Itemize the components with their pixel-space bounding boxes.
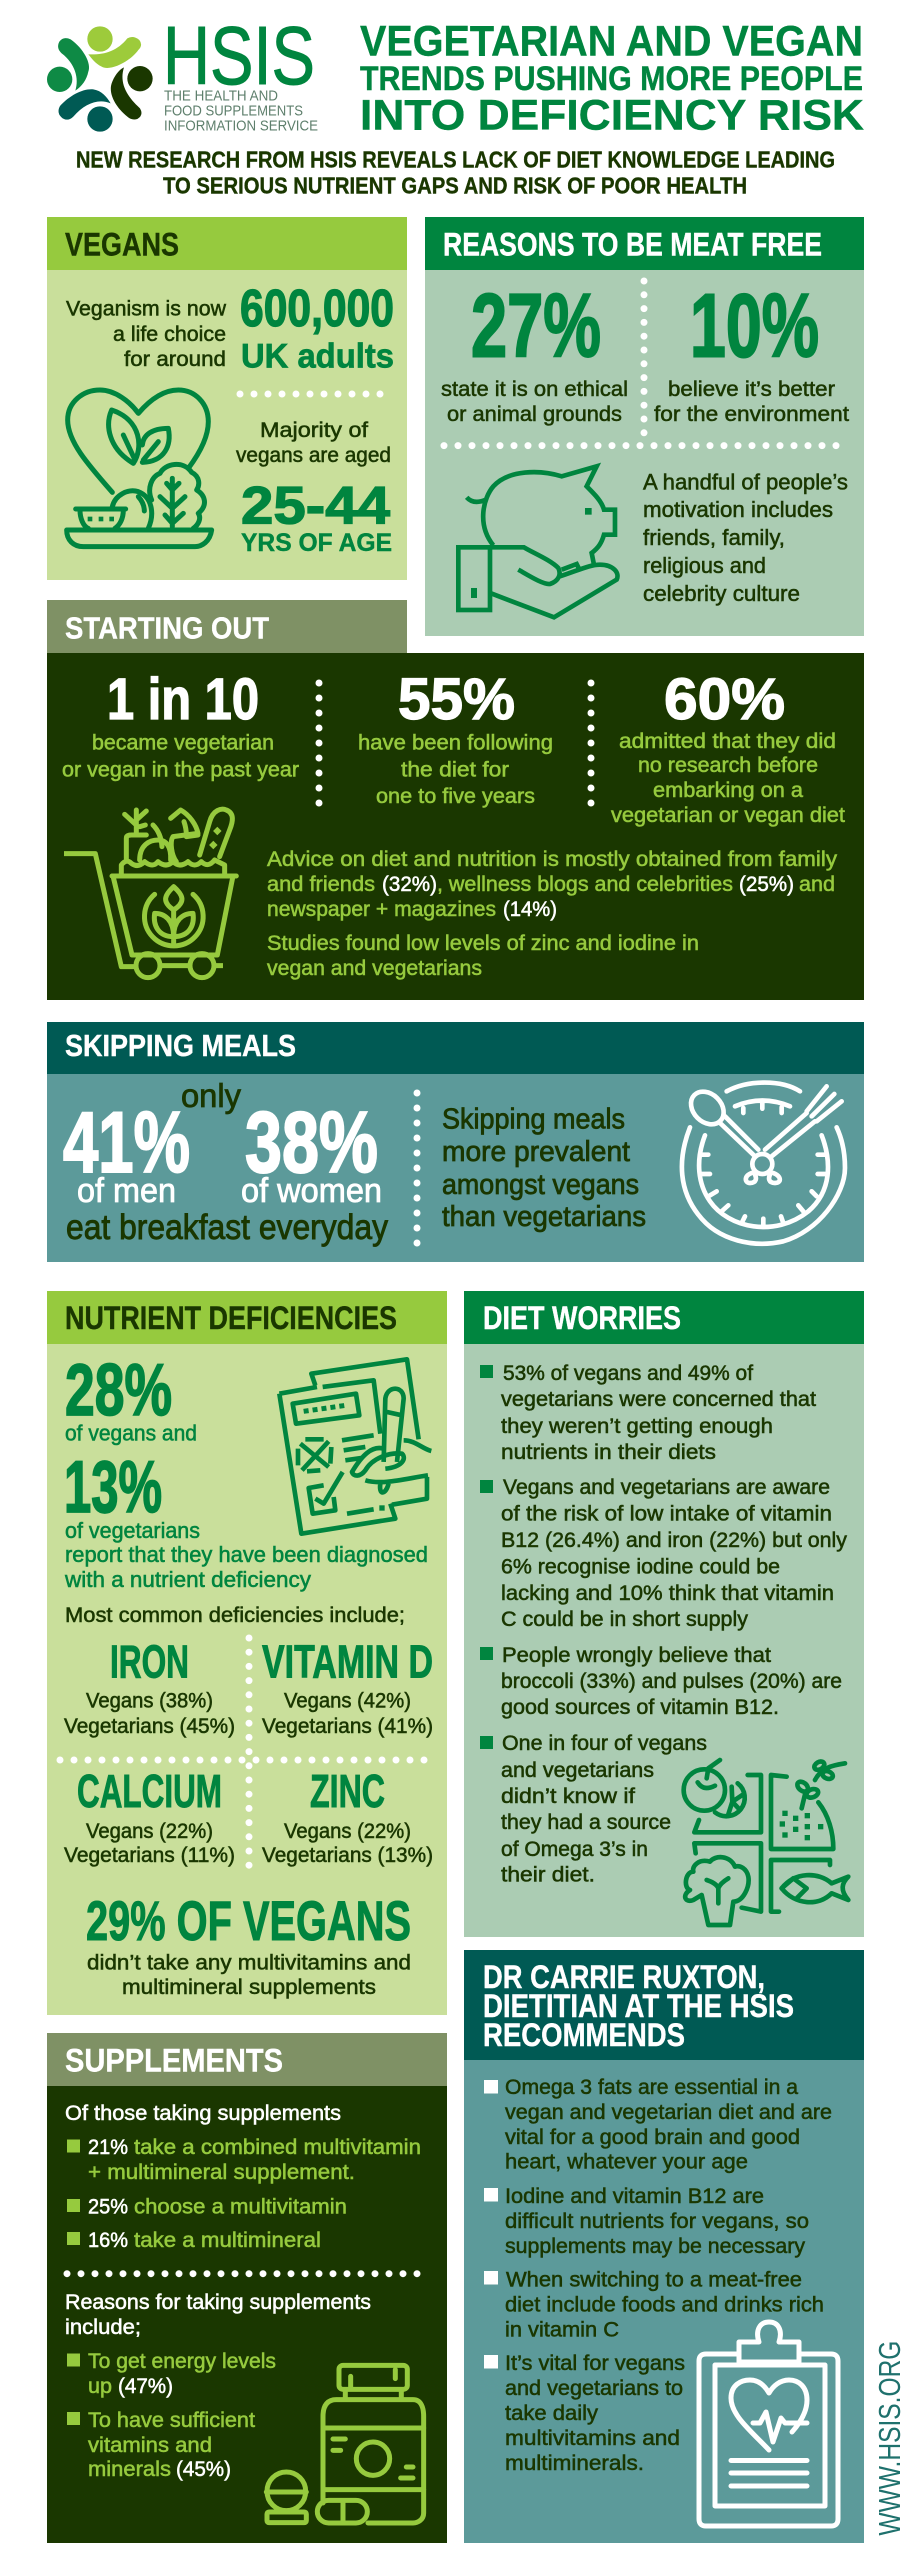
text: advice on diet: , wellness blogs and celebrities [437,873,733,896]
icon: plate clock with spoon and fork [682,1083,845,1244]
icon: four food groups [684,1760,848,1925]
stat: 28% of vegans: of vegans and [65,1420,197,1446]
block: iron: IRON [110,1636,189,1688]
bullet: iodine and B12: Iodine and vitamin B12 are [505,2184,764,2208]
title: VEGETARIAN AND VEGAN [360,17,863,65]
bullet: omega 3 [480,1732,707,1887]
bullet: awareness of low intake: lacking and 10% think that vitamin [501,1582,834,1605]
block: calcium [64,1765,235,1867]
panel: supplements [47,2033,447,2543]
heading: diet worries: DIET WORRIES [483,1300,681,1336]
text: most common deficiencies: Most common deficiencies include; [65,1603,405,1627]
text: studies: vegan and vegetarians [267,957,482,980]
text: no research: admitted that they did [619,730,836,753]
text: reasons for taking: include; [65,2315,141,2339]
text: no research: no research before [638,754,818,777]
bullet: awareness of low intake: C could be in short supply [501,1608,749,1631]
stat: 25-44 years of age: 25-44 [241,476,391,536]
stat: 1 in 10: 1 in 10 [107,667,259,732]
text: handful of people: friends, family, [643,525,785,550]
text: following the diet: one to five years [376,785,535,808]
stat: 600,000 UK adults: UK adults [241,338,394,376]
stat: 600,000 UK adults: 600,000 [240,280,394,338]
bullet: energy levels: (47%) [118,2374,173,2398]
stat: 13% of vegetarians: with a nutrient deficiency [64,1567,311,1592]
stat: 28% of vegans: 28% [65,1350,172,1431]
text: studies [267,932,699,980]
bullet: energy levels [67,2349,276,2398]
bullet: vitamin C [484,2268,824,2341]
stat: 38% of women [241,1095,382,1210]
bullet: omega 3: they had a source [501,1811,671,1834]
stat: 25-44 years of age [241,476,392,557]
text: skipping prevalence: more prevalent [442,1136,630,1168]
bullet: iodine and B12: supplements may be necessary [505,2234,805,2258]
bullet: vitamin C: diet include foods and drinks rich [505,2292,824,2316]
bullet: 16%: take a multimineral [134,2228,321,2252]
text: became vegetarian [62,732,299,782]
bullet: sufficient vitamins: (45%) [176,2457,231,2481]
stat: 41% of men: 41% [63,1095,190,1191]
text: environment: for the environment [654,402,849,426]
stat: 41% of men [63,1095,190,1210]
stat: 55%: 55% [398,667,515,732]
text: skipping prevalence: amongst vegans [442,1169,639,1201]
stat: 13% of vegetarians: report that they have been diagnosed [65,1542,428,1567]
logo wordmark: HSIS [163,9,315,102]
text: ethical grounds: or animal grounds [447,402,622,426]
text: handful of people [643,470,848,606]
block: zinc: ZINC [310,1765,385,1817]
block: vitamin D [262,1636,433,1738]
text: only: only [181,1077,241,1114]
text: handful of people: celebrity culture [643,581,800,606]
heading: supplements: SUPPLEMENTS [65,2042,283,2078]
text: became vegetarian: or vegan in the past year [62,758,299,782]
block: calcium: Vegans (22%) [86,1820,213,1843]
bullet: energy levels: To get energy levels [88,2349,276,2373]
text: reasons for taking [65,2290,371,2339]
bullet: daily multivitamins: It’s vital for vegans [505,2351,685,2375]
text: advice on diet [267,848,838,921]
bullet: 21%: take a combined multivitamin [134,2135,421,2159]
icon: document and pencil [279,1359,431,1534]
text: no supplements: didn’t take any multivitamins and [87,1952,411,1974]
text: advice on diet: (14%) [503,898,557,921]
text: skipping prevalence [442,1104,646,1233]
text: website url: WWW.HSIS.ORG [872,2341,907,2536]
text: following the diet: the diet for [401,758,509,782]
text: studies: Studies found low levels of zinc and iodine in [267,932,699,955]
panel: diet worries [464,1291,864,1937]
bullet: 25%: 25% [88,2194,128,2218]
text: advice on diet: (25%) [739,873,794,896]
text: life choice: for around [124,347,226,371]
stat: 13% of vegetarians: of vegetarians [65,1518,200,1543]
bullet: daily multivitamins: take daily [505,2401,598,2425]
text: ethical grounds: state it is on ethical [441,377,628,401]
text: advice on diet: (32%) [382,873,437,896]
bullet: awareness of low intake [480,1476,847,1631]
bullet: energy levels: up [88,2374,112,2398]
panel: starting out [47,600,864,1000]
bullet: omega 3 fats [484,2075,832,2174]
text: advice on diet: and friends [267,873,375,896]
heading: dr carrie ruxton: DIETITIAN AT THE HSIS [483,1988,794,2024]
bullet: omega 3 fats: vegan and vegetarian diet and are [505,2100,832,2124]
text: life choice: a life choice [113,322,226,346]
bullet: 21%: + multimineral supplement. [88,2160,355,2184]
text: handful of people: motivation includes [643,497,833,522]
stat: 25-44 years of age: YRS OF AGE [241,529,392,557]
bullet: sufficient vitamins: minerals [88,2457,171,2481]
stat: 13% of vegetarians [64,1447,428,1592]
bullet: iodine and B12: difficult nutrients for vegans, so [505,2209,809,2233]
block: calcium: Vegetarians (11%) [64,1844,235,1867]
icon: pig in a hand [458,466,617,617]
panel: dr carrie ruxton recommends [464,1950,864,2543]
text: majority: Majority of [260,418,368,442]
bullet: concerned about nutrients: they weren’t getting enough [501,1415,773,1438]
bullet: omega 3: didn’t know if [501,1785,635,1808]
icon: supplement bottle and pills [266,2365,424,2523]
bullet: omega 3: of Omega 3’s in [501,1838,648,1861]
bullet: daily multivitamins [484,2351,685,2475]
heading: dr carrie ruxton: DR CARRIE RUXTON, [483,1959,765,1995]
bullet: daily multivitamins: and vegetarians to [505,2376,683,2400]
bullet: 21%: 21% [88,2135,128,2159]
block: vitamin D: Vegetarians (41%) [262,1715,433,1738]
bullet: wrong B12 beliefs: People wrongly believe that [502,1644,771,1667]
text: life choice [66,296,226,371]
text: following the diet [358,732,553,808]
bullet: wrong B12 beliefs: good sources of vitamin B12. [501,1696,779,1719]
heading: skipping meals: SKIPPING MEALS [65,1028,296,1063]
title: INTO DEFICIENCY RISK [360,91,864,139]
bullet: omega 3 fats: heart, whatever your age [505,2150,748,2174]
subtitle: TO SERIOUS NUTRIENT GAPS AND RISK OF POOR HEALTH [163,173,747,199]
icon: HSIS people mark [47,26,153,132]
text: advice on diet: and [799,873,835,896]
bullet: omega 3 fats: Omega 3 fats are essential in a [505,2075,798,2099]
stat: 10%: 10% [690,277,819,377]
block: calcium: CALCIUM [77,1765,222,1817]
text: following the diet: have been following [358,732,553,755]
icon: clipboard with heart [699,2322,838,2526]
bullet: awareness of low intake: 6% recognise iodine could be [501,1556,780,1579]
heading: reasons: REASONS TO BE MEAT FREE [443,226,822,262]
title: TRENDS PUSHING MORE PEOPLE [360,60,863,98]
bullet: 25%: choose a multivitamin [134,2194,347,2218]
bullet: vitamin C: When switching to a meat-free [506,2268,802,2292]
bullet: omega 3: and vegetarians [501,1759,654,1782]
text: handful of people: religious and [643,553,766,578]
icon: heart with plant food [67,390,212,547]
text: reasons for taking: Reasons for taking supplements [65,2290,371,2314]
heading: starting out: STARTING OUT [65,611,269,646]
block: vitamin D: VITAMIN D [262,1636,433,1688]
bullet: awareness of low intake: Vegans and vegetarians are aware [503,1476,830,1499]
block: zinc: Vegetarians (13%) [262,1844,433,1867]
bullet: sufficient vitamins: vitamins and [88,2433,212,2457]
text: no supplements [87,1952,411,1999]
text: majority: vegans are aged [236,443,391,467]
text: environment [654,377,849,426]
block: zinc [262,1765,433,1867]
bullet: concerned about nutrients [480,1362,816,1464]
block: iron: Vegans (38%) [86,1690,213,1712]
bullet: wrong B12 beliefs: broccoli (33%) and pulses (20%) are [501,1670,842,1693]
panel: reasons to be meat free [425,217,864,636]
text: life choice: Veganism is now [66,296,226,320]
text: became vegetarian: became vegetarian [92,732,274,755]
bullet: wrong B12 beliefs [480,1644,842,1719]
text: handful of people: A handful of people’s [643,470,848,494]
block: iron: Vegetarians (45%) [64,1715,235,1738]
logo strapline: FOOD SUPPLEMENTS [164,102,303,120]
text: skipping prevalence: than vegetarians [442,1201,646,1233]
panel: nutrient deficiencies [47,1291,447,2015]
text: eat breakfast everyday: eat breakfast everyday [66,1208,388,1247]
heading: vegans: VEGANS [65,226,179,262]
subtitle [76,147,835,199]
title [360,17,864,139]
bullet: omega 3: their diet. [501,1864,595,1887]
text: environment: believe it’s better [668,377,835,401]
text: no research [611,730,845,827]
text: advice on diet: Advice on diet and nutrition is mostly obtained from family [267,848,838,871]
text: majority [236,418,391,467]
bullet: daily multivitamins: multivitamins and [505,2426,680,2450]
stat: 38% of women: 38% [245,1095,378,1191]
stat: 27%: 27% [471,277,601,377]
panel: vegans [47,217,407,580]
bullet: daily multivitamins: multiminerals. [505,2451,644,2475]
stat: 38% of women: of women [241,1172,382,1210]
bullet: 21% [67,2135,421,2184]
text: no research: embarking on a [653,779,803,802]
stat: 13% of vegetarians: 13% [64,1447,162,1528]
bullet: omega 3 fats: vital for a good brain and good [505,2125,800,2149]
panel: skipping meals [47,1022,864,1262]
text: skipping prevalence: Skipping meals [442,1104,625,1136]
block: iron [64,1636,235,1738]
bullet: awareness of low intake: B12 (26.4%) and iron (22%) but only [501,1529,847,1552]
text: advice on diet: newspaper + magazines [267,898,496,921]
bullet: sufficient vitamins [67,2408,255,2481]
stat: 29% of vegans: 29% OF VEGANS [86,1889,411,1952]
bullet: 16%: 16% [88,2228,128,2252]
bullet: sufficient vitamins: To have sufficient [88,2408,255,2432]
logo: HSIS [47,9,318,134]
block: vitamin D: Vegans (42%) [284,1690,411,1712]
bullet: concerned about nutrients: 53% of vegans and 49% of [503,1362,753,1385]
text: no supplements: multimineral supplements [122,1976,376,1999]
logo strapline [164,88,318,134]
logo strapline: INFORMATION SERVICE [164,118,318,134]
text: no research: vegetarian or vegan diet [611,804,845,827]
heading: dr carrie ruxton: RECOMMENDS [483,2017,685,2053]
stat: 600,000 UK adults [240,280,394,376]
block: zinc: Vegans (22%) [284,1820,411,1843]
stat: 41% of men: of men [77,1172,176,1210]
bullet: awareness of low intake: of the risk of low intake of vitamin [501,1502,832,1526]
logo strapline: THE HEALTH AND [164,88,278,104]
bullet: iodine and B12 [484,2184,809,2258]
bullet: omega 3: One in four of vegans [502,1732,707,1755]
bullet: vitamin C: in vitamin C [505,2317,619,2341]
stat: 60%: 60% [664,667,785,732]
text: of those taking supplements: Of those taking supplements [65,2101,341,2125]
icon: shopping cart with produce [64,809,236,978]
text: ethical grounds [441,377,628,426]
bullet: concerned about nutrients: nutrients in their diets [501,1441,716,1464]
heading: dr carrie ruxton [483,1959,794,2053]
heading: nutrient deficiencies: NUTRIENT DEFICIENCIES [65,1300,397,1336]
bullet: concerned about nutrients: vegetarians were concerned that [501,1388,816,1411]
